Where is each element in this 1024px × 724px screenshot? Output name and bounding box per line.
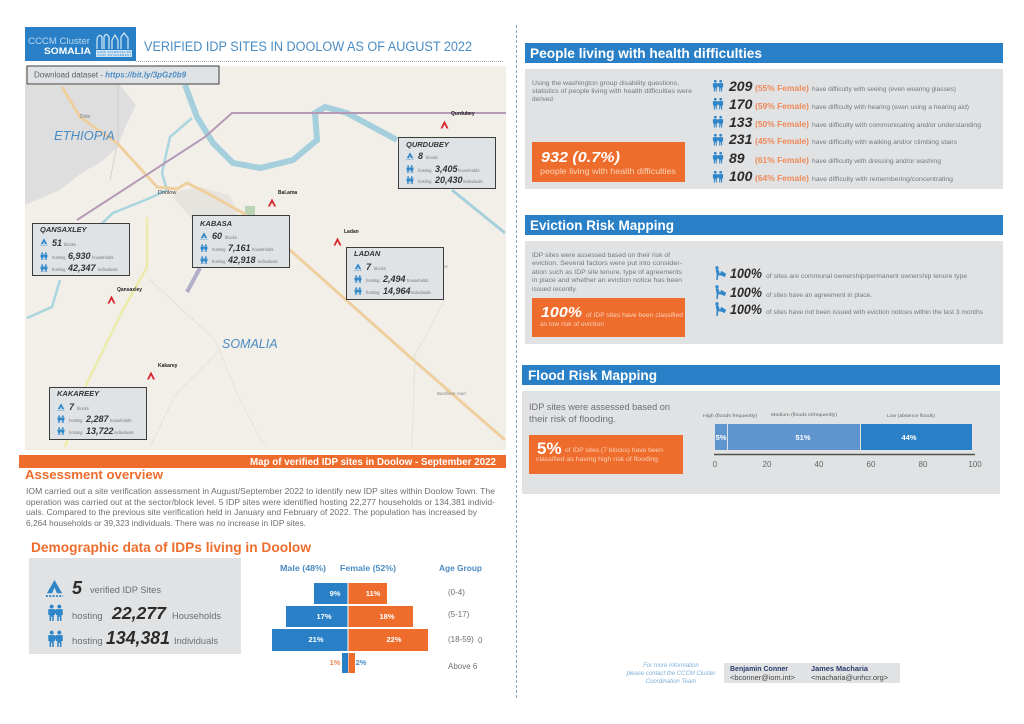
map place names: Qansaxley	[117, 287, 142, 293]
icon: people	[48, 631, 63, 647]
callout: 5% high risk	[529, 435, 683, 474]
map caption bar: Map of verified IDP sites in Doolow - September 2022	[250, 457, 496, 468]
chart: age and sex pyramid: 18%	[379, 612, 395, 621]
callout: Qansaxley: 51	[52, 238, 62, 248]
panel: demographic totals: hosting	[72, 611, 103, 622]
row: remembering: (64% Female)	[755, 174, 809, 183]
text block: washington group intro: Using the washington group disability questions,	[532, 80, 679, 87]
callout: Ladan: LADAN	[354, 249, 381, 258]
chart: age and sex pyramid: 22%	[386, 635, 402, 644]
map place names: Ladan	[344, 229, 359, 235]
header: eviction risk mapping	[525, 215, 1003, 235]
row: dressing: (61% Female)	[755, 156, 809, 165]
callout: Kakareey: 2,287	[85, 414, 110, 424]
chart: age and sex pyramid: 0	[478, 636, 483, 645]
text block: eviction intro: issued recently.	[532, 286, 577, 293]
panel: health difficulties	[525, 69, 1003, 189]
chart: age and sex pyramid: 9%	[330, 589, 341, 598]
footer: contacts	[724, 663, 900, 683]
row: eviction notice	[715, 302, 983, 317]
footer: contacts: Benjamin Conner	[730, 666, 788, 673]
callout: Ladan: 7	[366, 262, 372, 272]
row: communicating: (50% Female)	[755, 120, 809, 129]
callout: 932 people: 932 (0.7%)	[541, 149, 620, 166]
footer: contacts: <macharia@unhcr.org>	[811, 675, 888, 682]
callout: Qurdubey: 3,405	[435, 164, 459, 174]
text block: assessment overview: operation was carried out at the sector/block level. 5 IDP sites were identified hosting 22,277 households or 134,381 individ-	[26, 497, 495, 507]
callout: Qansaxley: hosting	[52, 267, 66, 272]
text block: assessment overview: 6,264 households or 39,323 individuals. There was no increase in IDP sites.	[26, 518, 306, 528]
callout: Qurdubey: individuals	[463, 179, 483, 184]
panel: demographic totals: Households	[172, 611, 221, 622]
callout: Kakareey: hosting	[69, 430, 83, 435]
callout: Kakareey: 13,722	[86, 426, 114, 436]
row: eviction notice: 100%	[730, 302, 762, 317]
map place names: place	[437, 264, 448, 269]
callout: 100% low risk: as low risk of eviction	[540, 321, 604, 328]
callout: Ladan: 14,964	[383, 286, 411, 296]
callout: Kakareey	[50, 388, 146, 440]
map caption bar	[19, 455, 506, 468]
row: dressing: have difficulty with dressing and/or washing	[812, 158, 941, 165]
map of verified IDP sites	[25, 66, 506, 450]
chart: age and sex pyramid: (5-17)	[448, 610, 470, 619]
chart: flood risk stacked bar: 51%	[795, 433, 811, 442]
marker: Qansaxley site	[107, 295, 116, 304]
row: eviction notice: of sites have not been issued with eviction notices within the last 3 months	[766, 309, 983, 316]
footer: contact note: For more information	[643, 663, 700, 669]
text block: flood intro: IDP sites were assessed based on	[529, 402, 670, 413]
marker: Qurdubey site	[440, 120, 449, 129]
callout: Ladan: blocks	[374, 266, 386, 271]
callout: Ladan: households	[407, 278, 428, 283]
text block: washington group intro: statistics of people living with health difficulties were	[532, 88, 692, 95]
map place names: Doolow	[158, 190, 176, 196]
row: walking: (45% Female)	[755, 137, 809, 146]
row: hearing	[713, 96, 969, 112]
panel: demographic totals: Individuals	[174, 636, 218, 647]
row: tenure	[715, 266, 967, 281]
chart: flood risk stacked bar: 0	[713, 460, 718, 469]
page divider	[516, 25, 518, 700]
chart: age and sex pyramid: Male (48%)	[280, 563, 326, 573]
marker: Balcad site	[268, 198, 276, 207]
callout: Ladan: individuals	[411, 290, 431, 295]
footer: contacts: <bconner@iom.int>	[730, 675, 795, 682]
download dataset box	[27, 66, 219, 84]
header: flood risk mapping: Flood Risk Mapping	[528, 367, 657, 383]
callout: 100% low risk: of IDP sites have been classified	[586, 312, 683, 319]
callout: Qansaxley: blocks	[64, 242, 76, 247]
callout: Kabasa: 7,161	[228, 243, 251, 253]
row: dressing: 89	[729, 150, 745, 166]
row: seeing: (55% Female)	[755, 84, 809, 93]
callout: 5% high risk: of IDP sites (7 blocks) have been	[565, 447, 663, 454]
callout: Ladan: hosting	[366, 278, 380, 283]
callout: Kabasa: blocks	[225, 235, 237, 240]
callout: Qurdubey: blocks	[426, 155, 438, 160]
text block: assessment overview: IOM carried out a site verification assessment in August/September 2022 to identify new IDP sites within Doolow Town. The	[26, 486, 495, 496]
map place names: Dolo	[80, 114, 91, 120]
text block: washington group intro: derived	[532, 96, 553, 103]
row: tenure: 100%	[730, 266, 762, 281]
chart: flood risk stacked bar: 40	[815, 460, 824, 469]
logo: CCCM Cluster Somalia: CAMP COORDINATION	[97, 51, 131, 54]
map place names: Qurdubey	[451, 111, 475, 117]
callout: Qurdubey: households	[458, 168, 479, 173]
footer: contact note	[625, 663, 717, 685]
callout: Kakareey: hosting	[69, 418, 83, 423]
panel: demographic totals: 22,277	[111, 603, 167, 623]
footer: contact note: please contact the CCCM Cluster	[625, 671, 717, 677]
map label: Somalia: SOMALIA	[222, 337, 278, 351]
text block: assessment overview: uals. Compared to the previous site verification held in January and February of 2022. The population has increased by	[26, 507, 478, 517]
panel: demographic totals	[29, 558, 241, 654]
row: remembering: have difficulty with remembering/concentrating	[812, 176, 953, 183]
logo: CCCM Cluster Somalia: CCCM Cluster	[28, 36, 90, 47]
map place names	[80, 111, 475, 396]
heading: demographic data: Demographic data of IDPs living in Doolow	[31, 539, 311, 555]
chart: flood risk stacked bar: 20	[763, 460, 772, 469]
callout: Qurdubey: hosting	[418, 168, 432, 173]
chart: flood risk stacked bar: 80	[919, 460, 928, 469]
marker: Kakareey site	[147, 371, 155, 380]
chart: age and sex pyramid: (18-59)	[448, 635, 474, 644]
map place names: Bardhere road	[437, 391, 466, 396]
callout: Kakareey: 7	[69, 402, 75, 412]
row: hearing: 170	[729, 96, 753, 112]
callout: 932 people: people living with health difficulties	[540, 166, 676, 176]
text block: eviction intro: IDP sites were assessed based on their risk of	[532, 252, 670, 259]
text block: eviction intro: eviction. Several factors were put into consider-	[532, 260, 682, 267]
row: dressing	[713, 150, 941, 166]
callout: 5% high risk: 5%	[537, 439, 562, 458]
chart: flood risk stacked bar: 5%	[716, 433, 727, 442]
chart: age and sex pyramid: (0-4)	[448, 588, 465, 597]
callout: Ladan	[346, 248, 444, 300]
logo: CCCM Cluster Somalia	[25, 27, 136, 61]
chart: age and sex pyramid: Above 6	[448, 662, 478, 671]
callout: Qansaxley	[32, 224, 130, 276]
chart: age and sex pyramid: 11%	[366, 589, 381, 598]
row: remembering	[713, 168, 953, 184]
row: walking: 231	[728, 131, 753, 147]
callout: Kakareey: KAKAREEY	[57, 389, 100, 398]
callout: Ladan: hosting	[366, 290, 380, 295]
panel: demographic totals: 134,381	[106, 628, 170, 648]
heading: assessment overview: Assessment overview	[25, 467, 164, 482]
panel: demographic totals: 5	[72, 578, 83, 598]
callout: 5% high risk: classified as having high risk of flooding	[536, 456, 658, 463]
callout: Qansaxley: individuals	[98, 267, 118, 272]
callout: Kakareey: households	[110, 418, 131, 423]
logo: CCCM Cluster Somalia: SOMALIA	[44, 46, 92, 56]
callout: Qansaxley: 42,347	[67, 263, 97, 273]
chart: age and sex pyramid: Female (52%)	[340, 563, 396, 573]
chart: flood risk stacked bar: Medium (floods infrequently)	[771, 412, 837, 418]
callout: Kabasa: households	[252, 247, 273, 252]
callout: Qurdubey: 20,430	[434, 175, 463, 185]
row: seeing: 209	[728, 78, 753, 94]
row: agreement	[715, 285, 872, 300]
header: flood risk mapping	[522, 365, 1000, 385]
text block: eviction intro: in place and whether an eviction notice has been	[532, 277, 682, 284]
map place names: Bal.ama	[278, 190, 297, 196]
chart: flood risk stacked bar: 100	[968, 460, 982, 469]
text block: eviction intro	[532, 252, 682, 293]
chart: age and sex pyramid: Age Group	[439, 563, 482, 573]
chart: flood risk stacked bar	[703, 412, 982, 469]
row: walking: have difficulty with walking and/or climbing stairs	[812, 139, 957, 146]
row: remembering: 100	[729, 168, 753, 184]
panel: eviction risk	[525, 241, 1003, 344]
callout: Kabasa: KABASA	[200, 219, 232, 228]
callout: Kabasa: 60	[212, 231, 222, 241]
row: communicating: 133	[729, 114, 753, 130]
text block: flood intro: their risk of flooding.	[529, 414, 616, 425]
callout: Ladan: 2,494	[382, 274, 406, 284]
row: walking	[713, 131, 957, 147]
chart: flood risk stacked bar: Low (absence floods)	[887, 413, 935, 419]
callout: Kabasa	[192, 216, 290, 268]
header: people living with health difficulties: People living with health difficulties	[530, 45, 762, 61]
callout: Qansaxley: 6,930	[68, 251, 91, 261]
row: agreement: 100%	[730, 285, 762, 300]
map label: Ethiopia: ETHIOPIA	[54, 128, 115, 143]
callout: Kakareey: blocks	[77, 406, 89, 411]
callout: Kabasa: hosting	[212, 259, 226, 264]
chart: age and sex pyramid	[272, 563, 483, 673]
callout: Qurdubey: QURDUBEY	[406, 140, 450, 149]
text block: washington group intro	[532, 80, 692, 103]
callout: Qansaxley: hosting	[52, 255, 66, 260]
row: hearing: (59% Female)	[755, 102, 809, 111]
chart: flood risk stacked bar: High (floods frequently)	[703, 413, 757, 419]
row: tenure: of sites are communal ownership/permanent ownership tenure type	[766, 273, 967, 280]
header: eviction risk mapping: Eviction Risk Mapping	[530, 217, 674, 233]
header: people living with health difficulties	[525, 43, 1003, 63]
text block: eviction intro: ation such as IDP site tenure, type of agreements	[532, 269, 682, 276]
callout: 100% low risk	[532, 298, 685, 337]
panel: demographic totals: hosting	[72, 636, 103, 647]
row: agreement: of sites have an agreement in place.	[766, 292, 872, 299]
row: communicating	[713, 114, 981, 130]
map place names: Kakarey	[158, 363, 178, 369]
panel: flood risk	[522, 391, 1000, 494]
chart: age and sex pyramid: 1%	[330, 658, 341, 667]
callout: 932 people	[532, 142, 685, 182]
icon: tent	[46, 580, 63, 596]
text block: flood intro	[529, 402, 670, 425]
chart: flood risk stacked bar: 60	[867, 460, 876, 469]
row: seeing	[713, 78, 956, 94]
row: communicating: have difficulty with communicating and/or understanding	[812, 122, 981, 129]
callout: Qansaxley: QANSAXLEY	[40, 225, 88, 234]
callout: Kakareey: individuals	[114, 430, 134, 435]
chart: age and sex pyramid: 17%	[316, 612, 332, 621]
title: VERIFIED IDP SITES IN DOOLOW AS OF AUGUST 2022	[144, 39, 472, 54]
chart: age and sex pyramid: 21%	[308, 635, 324, 644]
icon: people	[48, 605, 63, 621]
callout: Qansaxley: households	[92, 255, 113, 260]
text block: assessment overview	[26, 486, 495, 528]
callout: Kabasa: hosting	[212, 247, 226, 252]
marker: Ladan site	[333, 237, 342, 246]
chart: flood risk stacked bar: 44%	[901, 433, 917, 442]
callout: Qurdubey	[398, 138, 496, 188]
callout: Qurdubey: 8	[418, 151, 423, 161]
callout: Kabasa: individuals	[258, 259, 278, 264]
chart: age and sex pyramid: 2%	[356, 658, 367, 667]
row: hearing: have difficulty with hearing (even using a hearing aid)	[812, 104, 969, 111]
logo: CCCM Cluster Somalia: CAMP MANAGEMENT	[97, 54, 131, 57]
footer: contact note: Coordination Team	[646, 679, 696, 685]
callout: Qurdubey: hosting	[418, 179, 432, 184]
row: seeing: have difficulty with seeing (even wearing glasses)	[812, 86, 956, 93]
panel: demographic totals: verified IDP Sites	[90, 585, 161, 596]
download dataset box: Download dataset - https://bit.ly/3pGz0b9	[34, 70, 187, 80]
callout: 100% low risk: 100%	[541, 304, 582, 321]
callout: Kabasa: 42,918	[227, 255, 256, 265]
footer: contacts: James Macharia	[811, 666, 868, 673]
